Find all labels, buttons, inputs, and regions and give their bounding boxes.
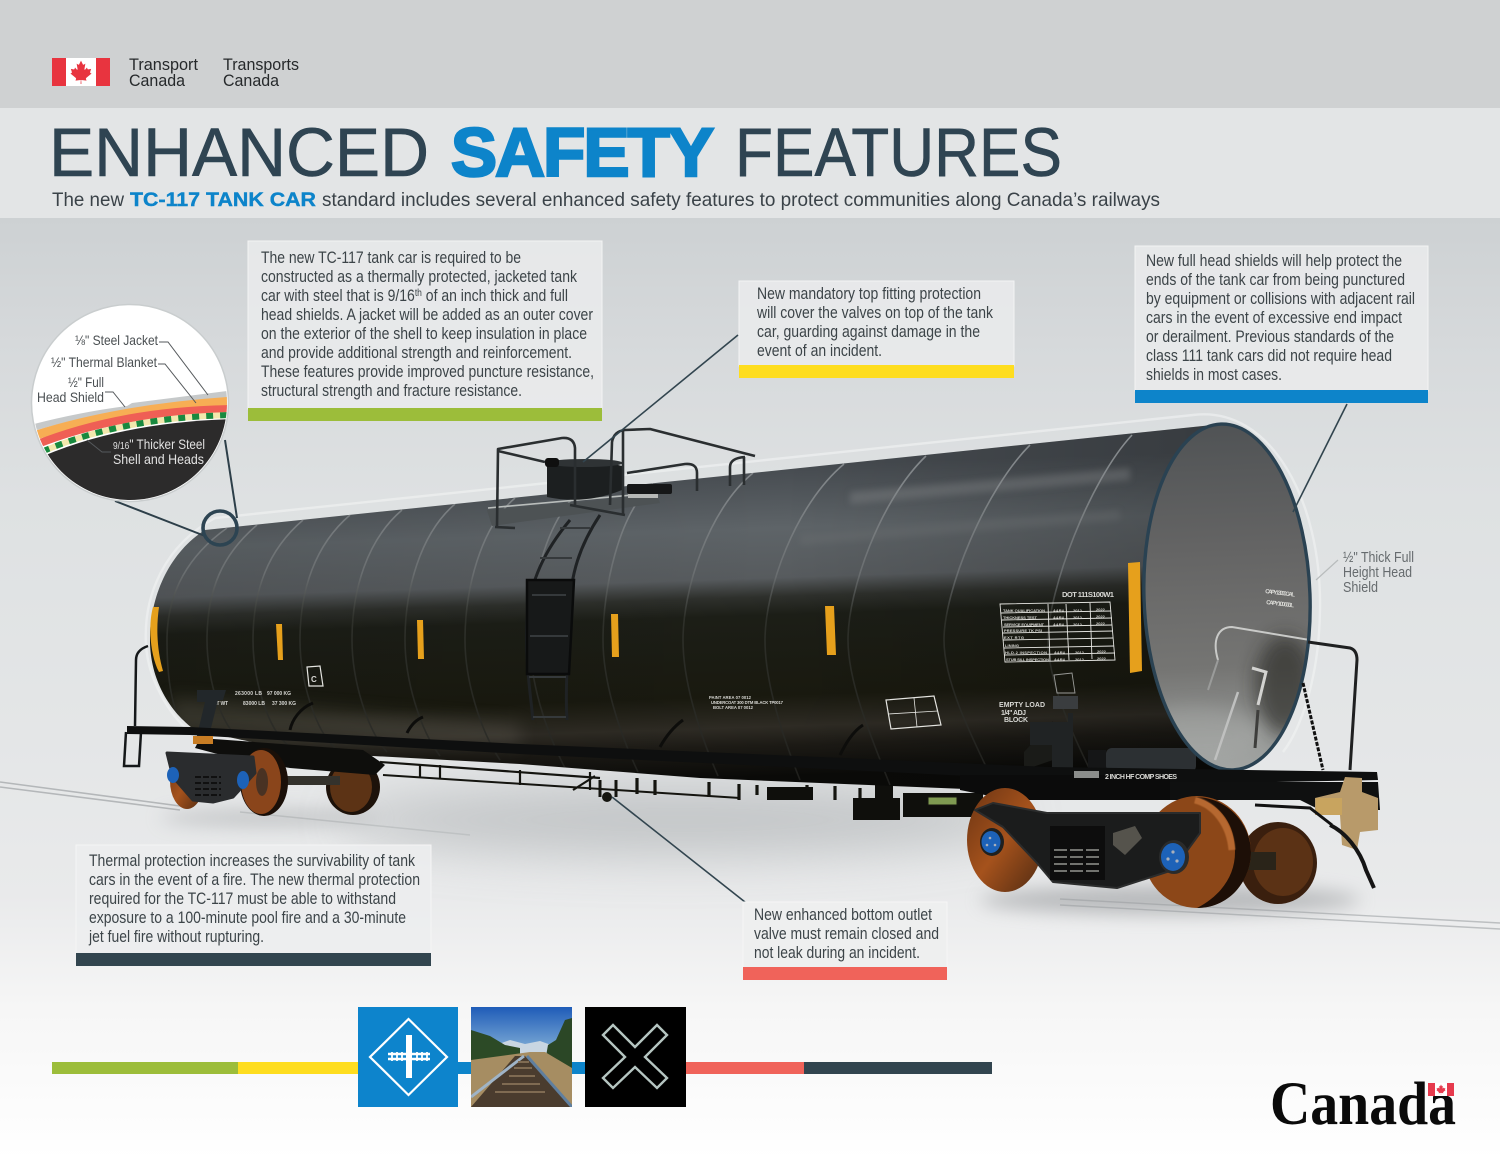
panel: thermally protected jacket [248, 241, 602, 421]
Transport Canada signature: Canada [129, 72, 186, 90]
leader: top fitting [583, 335, 738, 462]
tank stencil markings: 2022 [1096, 614, 1106, 619]
photo: railway through mountains [471, 1007, 572, 1107]
cross-section labels: ½" Thermal Blanket [51, 354, 157, 370]
label: head shield thickness: Height Head [1343, 565, 1412, 581]
roller bearing hubs [980, 828, 1189, 874]
icon: crossbuck [585, 1007, 686, 1107]
label: head shield thickness [1343, 550, 1414, 596]
side sill frame [127, 726, 1380, 810]
tank stencil markings: THICKNESS TEST [1003, 615, 1038, 620]
side sill frame: 2 INCH HF COMP SHOES [1105, 774, 1177, 781]
thermal protection description: exposure to a 100-minute pool fire and a 30-minute [89, 909, 406, 927]
Transport Canada signature: Transport [129, 56, 198, 74]
tank shell [150, 424, 1232, 790]
top fitting description [756, 285, 994, 360]
tank stencil markings: TANK QUALIFICATION [1003, 608, 1045, 613]
jacket description: constructed as a thermally protected, jacketed tank [261, 268, 578, 286]
jacket description: on the exterior of the shell to keep insulation in place [261, 325, 587, 343]
tank stencil markings: PRESSURE TK PSI [1004, 628, 1042, 633]
tank stencil markings: AAR4 [1053, 622, 1065, 627]
tank stencil markings: LINING [1005, 643, 1019, 648]
subtitle: standard includes several enhanced safety features to protect communities along Canada’s railways [322, 189, 1160, 211]
left truck rear wheels [170, 753, 380, 815]
front wheel [240, 748, 288, 816]
tank end head: CAPY 100 000 L [1266, 600, 1295, 609]
left end handrail and step [124, 646, 148, 766]
head shield description: New full head shields will help protect the [1146, 252, 1402, 270]
bottom outlet description [754, 906, 939, 962]
right truck [967, 777, 1378, 908]
title: FEATURES [735, 114, 1062, 191]
panel: top fitting protection [739, 281, 1014, 378]
jacket description: of an inch thick and full [422, 287, 568, 305]
jacket description: th [415, 288, 422, 299]
halo outline around tank [146, 414, 1320, 752]
side frame [167, 753, 255, 802]
head handrail and chain [1303, 642, 1357, 770]
bottom outlet description: valve must remain closed and [754, 925, 939, 943]
thermal protection description: required for the TC-117 must be able to withstand [89, 890, 396, 908]
tank stencil markings: 2022 [1096, 607, 1106, 612]
head shield description: or derailment. Previous standards of the [1146, 328, 1394, 346]
subtitle: TC-117 TANK CAR [130, 189, 316, 211]
head shield description: cars in the event of excessive end impact [1146, 309, 1402, 327]
label: head shield thickness: ½" Thick Full [1343, 550, 1414, 566]
thermal protection description: cars in the event of a fire. The new thermal protection [89, 871, 420, 889]
tank stencil markings: 2012 [1073, 622, 1083, 627]
tank stencil markings: EMPTY LOAD [999, 702, 1045, 709]
panel: full head shields [1135, 246, 1428, 403]
tank stencil markings: HLD.2 INSPECTION [1005, 650, 1047, 655]
top fitting description: New mandatory top fitting protection [757, 285, 981, 303]
tank stencil markings [209, 590, 1115, 729]
top railings and dome [487, 429, 755, 528]
Transport Canada signature: Transports [223, 56, 299, 74]
tank stencil markings: 2022 [1097, 649, 1107, 654]
colour bar [52, 1062, 992, 1074]
tank stencil markings: 2012 [1075, 657, 1085, 662]
cross-section labels: ½" Full [68, 374, 104, 390]
panel: wall cross-section inset [30, 304, 235, 510]
icon: railway crossing sign [358, 1007, 458, 1107]
tank car [124, 420, 1380, 908]
tank underframe piping [380, 762, 983, 820]
title [49, 114, 1062, 191]
subtitle: The new [52, 189, 125, 211]
top fitting description: event of an incident. [757, 342, 882, 360]
top fitting description: car, guarding against damage in the [757, 323, 980, 341]
tank stencil markings: UNDERCOAT 300 DTM BLACK TP0017 [711, 700, 784, 705]
leader: bottom outlet valve [612, 797, 745, 902]
left truck [167, 748, 288, 816]
thermal protection description: Thermal protection increases the survivability of tank [89, 852, 416, 870]
jacket description: and provide additional strength and reinforcement. [261, 344, 572, 362]
jacket description: head shields. A jacket will be added as an outer cover [261, 306, 593, 324]
tank stencil markings: 2022 [1096, 621, 1106, 626]
cross-section labels: 9/16" Thicker Steel [113, 436, 205, 452]
panel: thermal protection [76, 845, 431, 966]
tank stencil markings: STUB SILL INSPECTION [1006, 657, 1049, 662]
leader: head shield label [1316, 560, 1338, 580]
title: ENHANCED [49, 114, 429, 191]
cross-section leader lines [87, 342, 208, 452]
Canada wordmark: Canada [1270, 1071, 1456, 1138]
Transport Canada signature [52, 56, 299, 90]
ladder and walkway [527, 515, 600, 720]
tank stencil markings: 97 000 KG [267, 691, 291, 697]
thermal protection description [88, 852, 420, 946]
bolster window and springs [1050, 826, 1142, 880]
label: head shield thickness: Shield [1343, 580, 1378, 596]
tank stencil markings: BOLT AREA 07 0012 [713, 705, 754, 710]
head shield description: class 111 tank cars did not require head [1146, 347, 1392, 365]
head shield description: by equipment or collisions with adjacent rail [1146, 290, 1415, 308]
tank stencil markings: 83000 LB [243, 701, 265, 707]
tank stencil markings: 1/4" ADJ [1001, 710, 1026, 717]
tank end head [1142, 422, 1312, 770]
cross-section labels: Head Shield [37, 389, 104, 405]
tank stencil markings: 2012 [1075, 650, 1085, 655]
jacket description: The new TC-117 tank car is required to be [261, 249, 521, 267]
Transport Canada signature: Canada [223, 72, 280, 90]
head shield description: ends of the tank car from being punctured [1146, 271, 1405, 289]
coupler and air hose [1255, 777, 1378, 888]
panel: bottom outlet valve [743, 902, 947, 980]
head shield description [1146, 252, 1415, 384]
tank stencil markings: 37 300 KG [272, 701, 296, 707]
tank stencil markings: 2012 [1073, 608, 1083, 613]
bottom outlet description: New enhanced bottom outlet [754, 906, 932, 924]
cross-section layers [35, 391, 227, 500]
tank stencil markings: BLOCK [1004, 717, 1028, 724]
tank stencil markings: LD LMT [209, 691, 225, 697]
tank stencil markings: PAINT AREA 07 0012 [709, 695, 752, 700]
tank end head: CAPY 13000 GAL [1265, 589, 1296, 599]
tank stencil markings: EXT RTG [1004, 635, 1024, 640]
tank stencil markings: AAR4 [1053, 608, 1065, 613]
front left wheel [967, 788, 1043, 892]
tank stencil markings: C [311, 675, 317, 684]
title: SAFETY [451, 114, 714, 191]
rear right wheel [1238, 822, 1317, 904]
cross-section labels [37, 332, 205, 467]
jacket description: These features provide improved puncture resistance, [261, 363, 594, 381]
rail tracks [0, 782, 1500, 929]
jacket description: structural strength and fracture resistance. [261, 382, 522, 400]
orange reflective strips [150, 562, 1142, 673]
head shield description: shields in most cases. [1146, 366, 1282, 384]
ground shadow [160, 784, 1360, 914]
shell shading and seams [140, 420, 1240, 800]
springs [195, 777, 221, 795]
tank stencil markings: AAR4 [1053, 615, 1065, 620]
tank body brackets [196, 673, 1196, 778]
top fitting description: will cover the valves on top of the tank [756, 304, 994, 322]
bearing hubs [167, 767, 249, 789]
cross-section labels: Shell and Heads [113, 451, 204, 467]
jacket description: car with steel that is 9/16 [261, 287, 441, 305]
tank stencil markings: 2012 [1073, 615, 1083, 620]
leader: head shield [1293, 404, 1347, 512]
bottom outlet description: not leak during an incident. [754, 944, 920, 962]
magnifier ring [203, 511, 237, 545]
side frame and bolster [975, 803, 1200, 888]
tank stencil markings: SERVICE EQUIPMENT [1004, 622, 1045, 627]
tank stencil markings: 263000 LB [235, 691, 262, 697]
magnifier connectors [115, 440, 237, 536]
tank stencil markings: AAR4 [1054, 657, 1066, 662]
tank stencil markings: DOT 111S100W1 [1062, 590, 1115, 599]
front right wheel [1143, 796, 1251, 908]
jacket description [261, 249, 594, 400]
tank stencil markings: LT WT [214, 701, 228, 707]
tank stencil markings: 2022 [1097, 656, 1107, 661]
thermal protection description: jet fuel fire without rupturing. [88, 928, 264, 946]
tank stencil markings: AAR4 [1054, 650, 1066, 655]
cross-section labels: ⅛" Steel Jacket [75, 332, 158, 348]
